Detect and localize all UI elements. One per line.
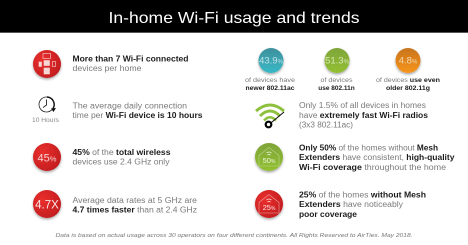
stat: 51.3 percent 802.11n: 51.3% xyxy=(325,56,350,66)
icon: 50 percent home coverage: 50% xyxy=(263,156,276,165)
text: 25 percent coverage xyxy=(299,190,426,219)
stat: 51.3 percent 802.11n: use 802.11n xyxy=(318,85,355,92)
text: 2.4 GHz share: 45% of the total wireless xyxy=(72,148,171,157)
text: 2.4 GHz share xyxy=(72,148,171,166)
text: data rates: Average data rates at 5 GHz are xyxy=(72,196,198,205)
text: devices per home: devices per home xyxy=(72,64,142,73)
text: fast radios: Only 1.5% of all devices in homes xyxy=(299,101,426,110)
text: devices per home xyxy=(72,54,189,73)
text: fast radios: have extremely fast Wi-Fi radios xyxy=(299,111,429,120)
text: data rates xyxy=(72,196,198,214)
icon: 4.7X badge: 4.7X xyxy=(35,200,59,212)
stat: 43.9 percent 802.11ac xyxy=(245,48,295,92)
icon: 45 percent badge: 45% xyxy=(38,152,57,164)
text: 50 percent coverage: Wi-Fi coverage throughout the home xyxy=(299,163,447,172)
stat: 43.9 percent 802.11ac: 43.9% xyxy=(259,56,284,66)
icon: clock 10 hours: 10 Hours xyxy=(32,118,59,124)
icon: 25 percent home coverage: 25% xyxy=(263,203,276,212)
stat: 4.8 percent 802.11g xyxy=(376,48,440,92)
text: devices per home: More than 7 Wi-Fi connected xyxy=(72,54,189,64)
text: daily connection time xyxy=(72,102,203,120)
text: 25 percent coverage: 25% of the homes without Mesh xyxy=(299,190,426,200)
text: fast radios xyxy=(299,101,429,130)
text: data rates: 4.7 times faster than at 2.4 GHz xyxy=(72,206,197,214)
text: daily connection time: time per Wi-Fi device is 10 hours xyxy=(72,111,203,120)
icon: clock 10 hours xyxy=(32,97,59,124)
icon: connected devices xyxy=(33,50,61,78)
text: 50 percent coverage: Only 50% of the homes without Mesh xyxy=(299,144,438,152)
text: 50 percent coverage: Extenders have consistent, high-quality xyxy=(299,153,455,162)
text: fast radios: (3x3 802.11ac) xyxy=(299,120,353,130)
icon: 50 percent home coverage xyxy=(255,143,283,171)
header bar with title xyxy=(0,0,468,33)
text: 25 percent coverage: poor coverage xyxy=(299,210,358,219)
stat: 4.8 percent 802.11g: 4.8% xyxy=(399,56,418,66)
stat: 43.9 percent 802.11ac: of devices have xyxy=(245,77,295,84)
header bar with title: In-home Wi-Fi usage and trends xyxy=(108,10,360,27)
stat: 43.9 percent 802.11ac: newer 802.11ac xyxy=(246,85,295,92)
text: daily connection time: The average daily connection xyxy=(72,102,187,110)
icon: 45 percent badge xyxy=(33,143,61,171)
text: 50 percent coverage xyxy=(299,144,455,172)
icon: 4.7X badge xyxy=(33,190,61,218)
icon: 25 percent home coverage xyxy=(255,190,283,218)
text: 25 percent coverage: Extenders have noticeably xyxy=(299,200,403,209)
icon: wifi speedometer xyxy=(256,105,284,127)
stat: 4.8 percent 802.11g: older 802.11g xyxy=(386,85,430,92)
stat: 51.3 percent 802.11n xyxy=(318,48,355,92)
footnote: Data is based on actual usage across 30 operators on four different continents. All Rights Reserved to AirTies. May 2018. xyxy=(56,233,412,239)
text: 2.4 GHz share: devices use 2.4 GHz only xyxy=(72,158,170,166)
stat: 51.3 percent 802.11n: of devices xyxy=(320,77,353,84)
stat: 4.8 percent 802.11g: of devices use even xyxy=(376,77,440,84)
